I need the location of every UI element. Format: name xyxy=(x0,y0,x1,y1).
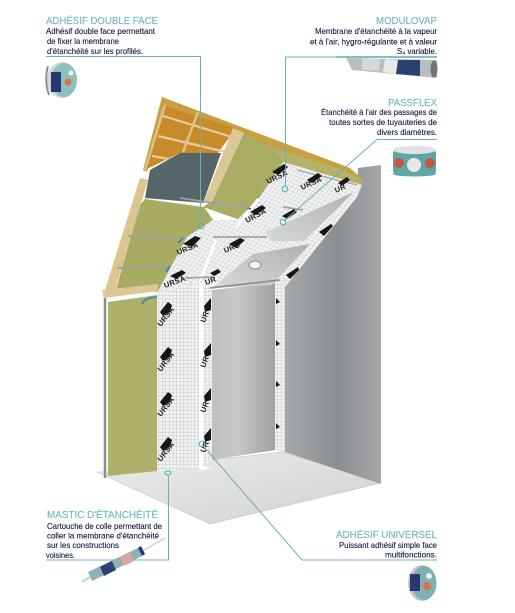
description: mastic d'étanchéité: sur les constructions xyxy=(47,541,119,550)
ceiling grey panel lower xyxy=(212,244,310,288)
leader: adhésif double face xyxy=(46,56,204,229)
URSA logos on wall: UR xyxy=(198,400,211,414)
leader: modulovap xyxy=(282,57,437,192)
leader: mastic xyxy=(46,471,171,560)
text block: passflex xyxy=(321,97,437,137)
metal profiles xyxy=(117,170,357,304)
roof membrane xyxy=(157,162,362,293)
URSA logos on roof: UR xyxy=(333,182,348,195)
left wall metal stud xyxy=(146,298,148,471)
description: passflex: toutes sortes de tuyauteries de xyxy=(329,118,437,127)
icon: membrane roll xyxy=(346,58,438,78)
roof joist cavities xyxy=(145,105,236,170)
roof mineral wool lower xyxy=(116,199,213,292)
heading: adhésif double face: ADHÉSIF DOUBLE FACE xyxy=(46,14,158,27)
URSA logos on roof: URSA xyxy=(299,174,324,192)
description: mastic d'étanchéité: voisines. xyxy=(46,551,75,560)
wall membrane xyxy=(157,281,212,472)
description: mastic d'étanchéité: Cartouche de colle permettant de xyxy=(47,522,162,531)
URSA logos on wall: URSA xyxy=(155,395,177,418)
wall edge profile xyxy=(104,298,106,478)
URSA logos on roof xyxy=(163,164,350,290)
eave timber rafter xyxy=(105,178,148,290)
heading: modulovap: MODULOVAP xyxy=(376,15,437,27)
description: mastic d'étanchéité: coller la membrane d'étanchéité xyxy=(47,532,159,540)
description: modulovap: et à l'air, hygro-régulante et à valeur xyxy=(310,38,437,46)
roof mineral wool upper xyxy=(203,133,283,220)
URSA logos on roof: URSA xyxy=(163,274,187,290)
ceiling grey panel upper xyxy=(266,192,354,241)
ceiling spotlight xyxy=(249,261,261,269)
heading: passflex: PASSFLEX xyxy=(388,97,437,109)
description: adhésif double face: d'étanchéité sur les profilés. xyxy=(47,47,143,56)
left wall mineral wool xyxy=(108,295,157,476)
description: adhésif double face: Adhésif double face permettant xyxy=(46,27,156,36)
building cutaway illustration xyxy=(97,97,381,524)
wall top plate xyxy=(102,284,158,298)
heading: adhésif universel: ADHÉSIF UNIVERSEL xyxy=(336,528,437,541)
white adhesive strip xyxy=(199,281,212,470)
roof timber frame xyxy=(143,97,363,186)
icon: passflex can xyxy=(393,146,436,176)
URSA logos on roof: URSA xyxy=(175,240,200,257)
white adhesive strip on roof xyxy=(200,199,258,281)
floor xyxy=(97,452,381,524)
text block: mastic d'étanchéité xyxy=(46,508,162,560)
leader: adhésif universel xyxy=(199,441,437,560)
timber rafter xyxy=(203,128,244,204)
URSA logos on wall: URSA xyxy=(155,305,177,328)
right strip membrane xyxy=(275,280,285,452)
URSA logos on wall: UR xyxy=(198,310,211,324)
description: passflex: divers diamètres. xyxy=(377,128,437,137)
URSA logos on wall: UR xyxy=(198,355,211,369)
URSA logos on roof: URSA xyxy=(265,168,289,186)
URSA logos on wall: URSA xyxy=(155,440,177,463)
description: adhésif universel: Puissant adhésif simple face xyxy=(339,541,437,550)
roof ridge olive strip xyxy=(272,147,363,186)
URSA logos on roof: URSA xyxy=(244,206,268,225)
icon: sealant cartridge xyxy=(82,538,165,582)
text block: adhésif double face xyxy=(46,14,158,56)
URSA logos on wall: UR xyxy=(198,440,211,454)
description: adhésif double face: de fixer la membrane xyxy=(47,37,119,46)
description: modulovap: Membrane d'étanchéité à la vapeur xyxy=(315,27,437,36)
icon: universal tape roll xyxy=(408,565,436,601)
text block: modulovap xyxy=(310,15,437,56)
description: passflex: Étanchéité à l'air des passages de xyxy=(321,108,437,117)
description: adhésif universel: multifonctions. xyxy=(385,550,437,560)
leader: passflex xyxy=(280,140,437,225)
URSA logos on wall xyxy=(155,298,280,463)
back grey panel xyxy=(212,283,275,460)
icon: adhesive tape roll xyxy=(46,62,77,98)
URSA logos on roof: URS xyxy=(222,240,241,255)
heading: mastic d'étanchéité: MASTIC D'ÉTANCHÉITÉ xyxy=(47,508,158,521)
URSA logos on roof: UR xyxy=(204,274,218,287)
URSA logos on wall: URSA xyxy=(155,350,177,373)
leader lines xyxy=(46,56,437,560)
text block: adhésif universel xyxy=(336,528,437,560)
right grey wall xyxy=(285,165,381,484)
description: modulovap: S₄ variable. xyxy=(397,47,437,56)
dark vapour layer xyxy=(145,153,221,203)
